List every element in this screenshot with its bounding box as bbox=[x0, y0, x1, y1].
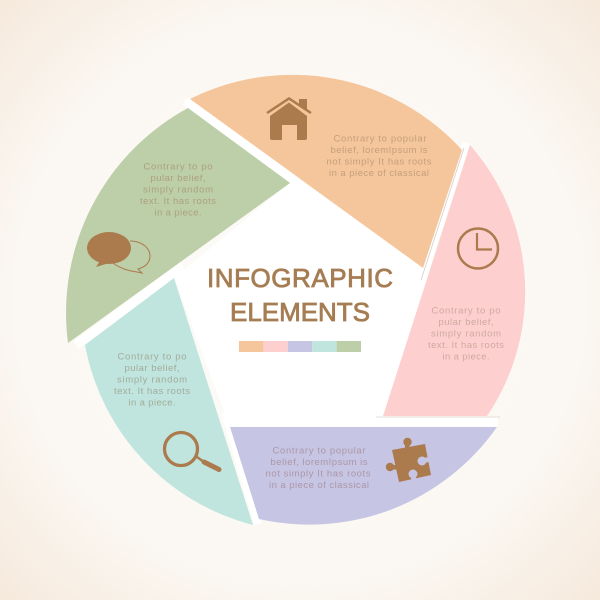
text: pink: in a piece. bbox=[442, 352, 490, 362]
text: orange: Contrary to popular bbox=[334, 134, 426, 144]
text: purple: belief, loremIpsum is bbox=[270, 457, 368, 468]
text: green: text. It has roots bbox=[140, 196, 216, 207]
text: pink bbox=[428, 306, 504, 362]
icon: speech bubbles bbox=[87, 232, 150, 273]
text: orange bbox=[326, 134, 432, 179]
icon: puzzle piece bbox=[386, 438, 432, 484]
icon: clock bbox=[458, 228, 498, 268]
text: purple bbox=[266, 446, 371, 491]
text: purple: Contrary to popular bbox=[272, 446, 366, 456]
text: orange: not simply It has roots bbox=[326, 156, 432, 168]
text: green: simply random bbox=[143, 184, 213, 196]
text: pink: text. It has roots bbox=[428, 340, 504, 351]
colour bar legend bbox=[239, 341, 361, 352]
panel: green speech segment bbox=[66, 108, 290, 343]
text: teal: in a piece. bbox=[128, 398, 176, 408]
text: purple: in a piece of classical bbox=[269, 480, 369, 491]
white centre and gaps bbox=[76, 101, 500, 524]
text: orange: in a piece of classical bbox=[329, 168, 429, 179]
icon: house bbox=[267, 98, 311, 140]
text: green: Contrary to po bbox=[144, 162, 212, 172]
text: pink: pular belief, bbox=[438, 317, 494, 328]
title: ELEMENTS bbox=[230, 297, 370, 327]
text: orange: belief, loremIpsum is bbox=[330, 145, 428, 156]
text: green: pular belief, bbox=[150, 173, 206, 184]
panel: teal magnifier segment bbox=[85, 278, 253, 525]
text: purple: not simply It has roots bbox=[266, 468, 371, 480]
text: green: in a piece. bbox=[154, 208, 202, 218]
text: teal bbox=[114, 352, 190, 408]
panel: pink clock segment bbox=[383, 145, 525, 416]
title: INFOGRAPHIC bbox=[207, 263, 393, 293]
text: green bbox=[140, 162, 216, 218]
text: pink: simply random bbox=[431, 328, 501, 340]
panel: orange home segment bbox=[190, 75, 462, 268]
text: teal: Contrary to po bbox=[118, 352, 186, 362]
text: teal: text. It has roots bbox=[114, 386, 190, 397]
title bbox=[207, 263, 393, 327]
panel: purple puzzle segment bbox=[230, 427, 497, 525]
icon: magnifier bbox=[164, 432, 219, 470]
text: teal: simply random bbox=[117, 374, 187, 386]
text: pink: Contrary to po bbox=[432, 306, 500, 316]
text: teal: pular belief, bbox=[124, 363, 180, 374]
